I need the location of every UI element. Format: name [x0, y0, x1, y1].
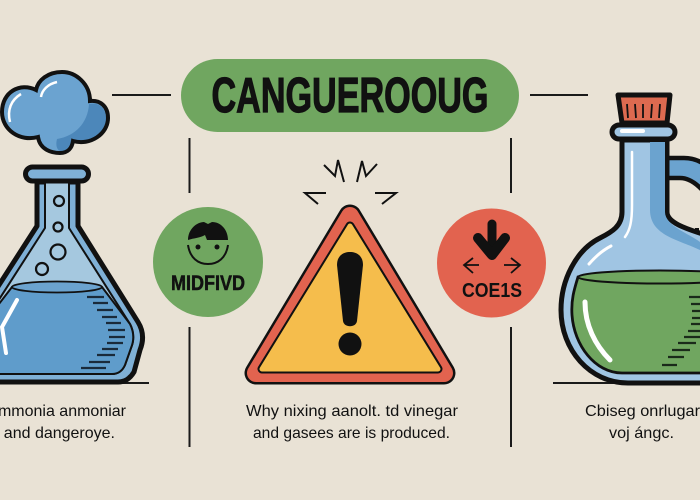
title banner: CANGUEROOUG [212, 69, 488, 123]
caption: left [0, 403, 127, 442]
icon: blue cloud [2, 72, 108, 153]
icon: round bottle with green liquid [561, 95, 700, 383]
title banner [181, 59, 519, 132]
caption: left: mmonia anmoniar [0, 403, 127, 420]
caption: center: Why nixing aanolt. td vinegar [246, 403, 459, 420]
warning triangle [256, 216, 444, 373]
badge: green face [153, 207, 263, 317]
caption: center [246, 403, 459, 442]
caption: right: voj ángc. [609, 425, 674, 442]
badge: red arrow [437, 208, 546, 318]
badge: red arrow: COE1S [462, 280, 522, 302]
caption: right: Cbiseg onrlugar [585, 403, 700, 420]
icon: conical flask with blue liquid [0, 167, 143, 382]
caption: right [585, 403, 700, 442]
caption: left: and dangeroye. [4, 425, 115, 442]
exclamation mark [337, 252, 363, 356]
caption: center: and gasees are is produced. [253, 425, 450, 442]
icon: warning sparks [305, 160, 396, 204]
badge: green face: MIDFIVD [171, 272, 245, 295]
